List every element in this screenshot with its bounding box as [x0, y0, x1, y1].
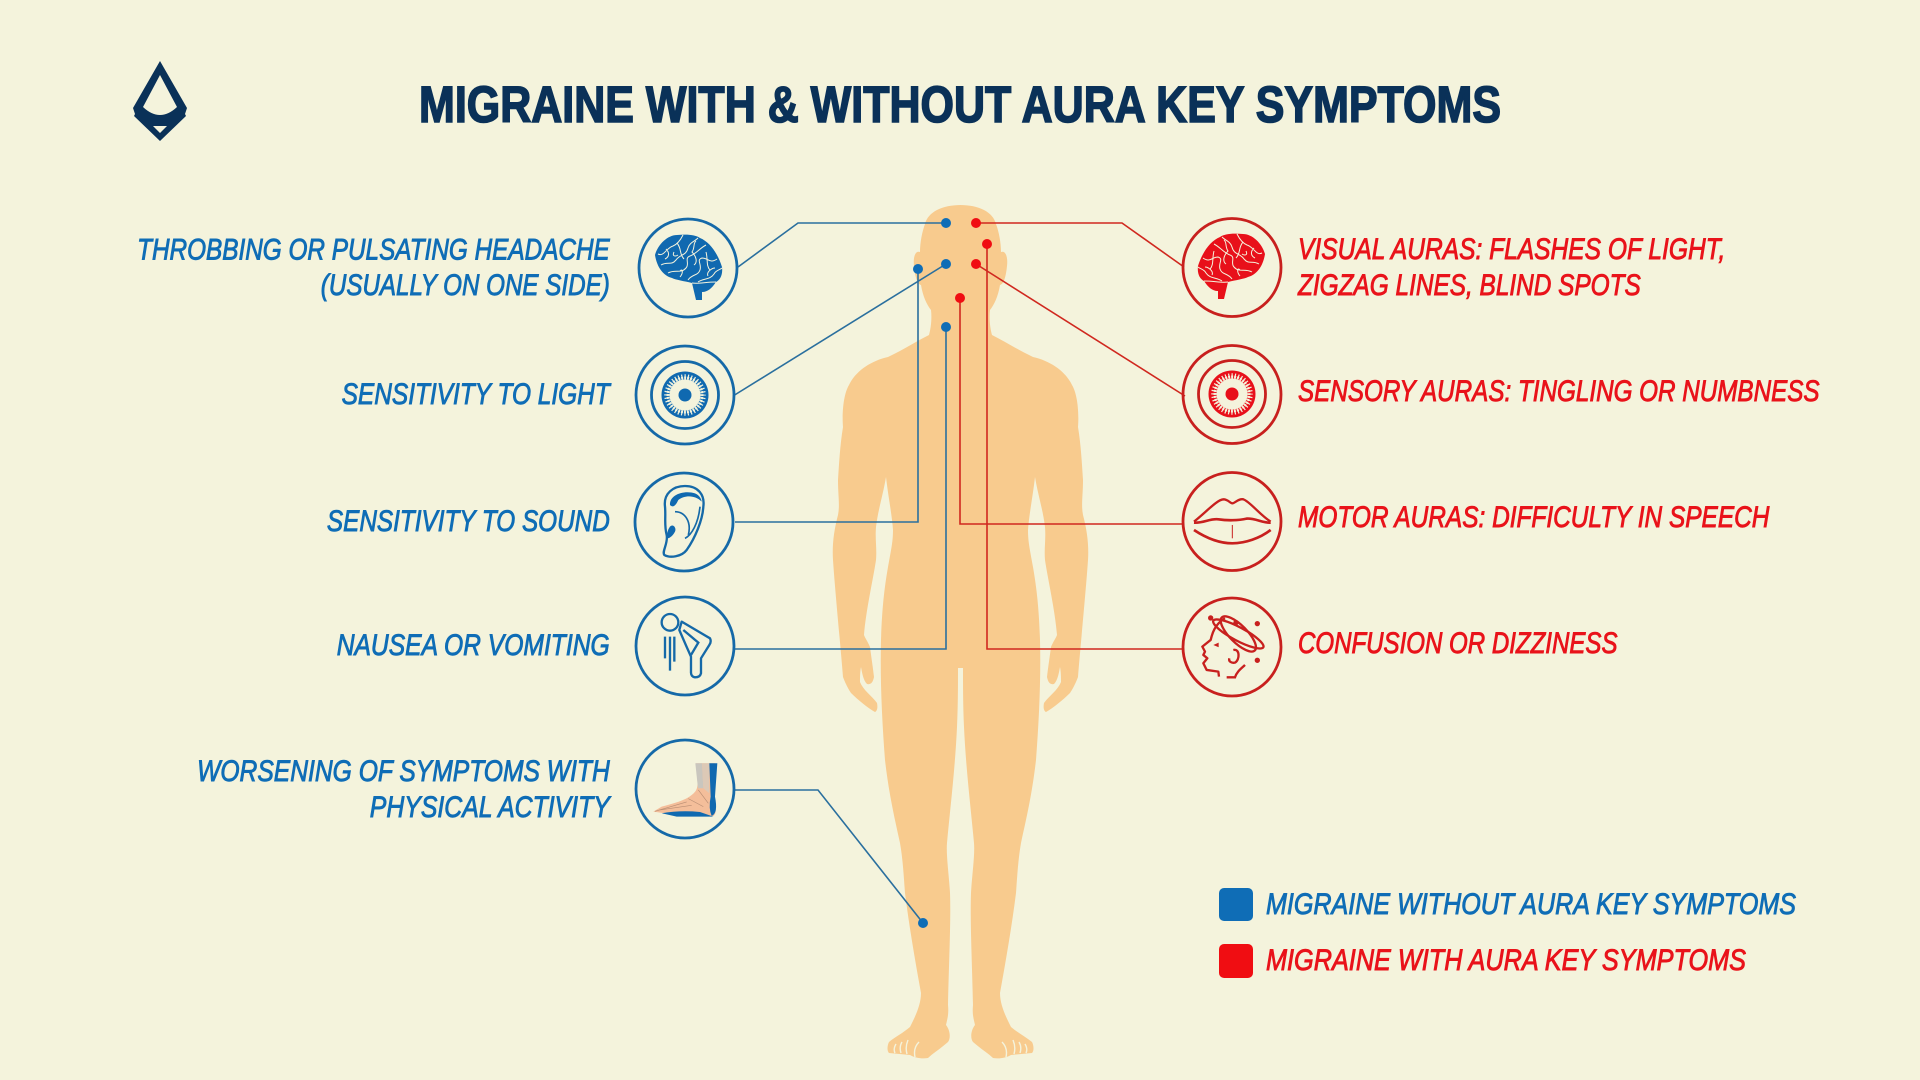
label: visual auras: VISUAL AURAS: FLASHES OF LIGHT,: [1298, 233, 1725, 266]
symptom dots: blue: [913, 218, 951, 928]
label: throbbing headache: (USUALLY ON ONE SIDE): [321, 269, 610, 302]
label: sensitivity to sound: SENSITIVITY TO SOUND: [327, 505, 610, 538]
icon: red dizzy head: [1183, 598, 1281, 696]
legend text: without aura: MIGRAINE WITHOUT AURA KEY SYMPTOMS: [1266, 888, 1796, 921]
icon: blue eye: [636, 346, 734, 444]
label: confusion or dizziness: CONFUSION OR DIZZINESS: [1298, 627, 1618, 660]
legend: [1219, 888, 1796, 978]
icon: blue brain: [639, 219, 737, 317]
label: motor auras: MOTOR AURAS: DIFFICULTY IN SPEECH: [1298, 501, 1770, 534]
label: throbbing headache: [137, 234, 611, 302]
connector lines: migraine without aura: [733, 223, 946, 923]
symptom dots: red: [955, 218, 992, 303]
legend swatch: with aura: [1219, 944, 1253, 978]
label: worsening with physical activity: WORSENING OF SYMPTOMS WITH: [197, 755, 610, 788]
legend text: with aura: MIGRAINE WITH AURA KEY SYMPTOMS: [1266, 944, 1746, 977]
icon: red brain: [1183, 218, 1281, 316]
icon: red eye: [1183, 346, 1281, 444]
human body silhouette: [833, 205, 1088, 1058]
label: visual auras: [1297, 233, 1725, 302]
label: visual auras: ZIGZAG LINES, BLIND SPOTS: [1297, 269, 1641, 302]
icon: blue nausea figure: [636, 597, 734, 695]
title: MIGRAINE WITH & WITHOUT AURA KEY SYMPTOMS: [419, 76, 1501, 133]
legend swatch: without aura: [1219, 888, 1253, 921]
label: throbbing headache: THROBBING OR PULSATING HEADACHE: [137, 234, 611, 267]
icon: blue foot: [636, 740, 734, 838]
label: nausea or vomiting: NAUSEA OR VOMITING: [337, 629, 610, 662]
label: worsening with physical activity: [197, 755, 611, 824]
connector lines: migraine with aura: [960, 223, 1185, 649]
icon: red lips: [1183, 472, 1281, 570]
icon: blue ear: [635, 473, 733, 571]
logo: [133, 61, 187, 141]
label: sensitivity to light: SENSITIVITY TO LIGHT: [342, 378, 612, 411]
label: worsening with physical activity: PHYSICAL ACTIVITY: [370, 791, 611, 824]
